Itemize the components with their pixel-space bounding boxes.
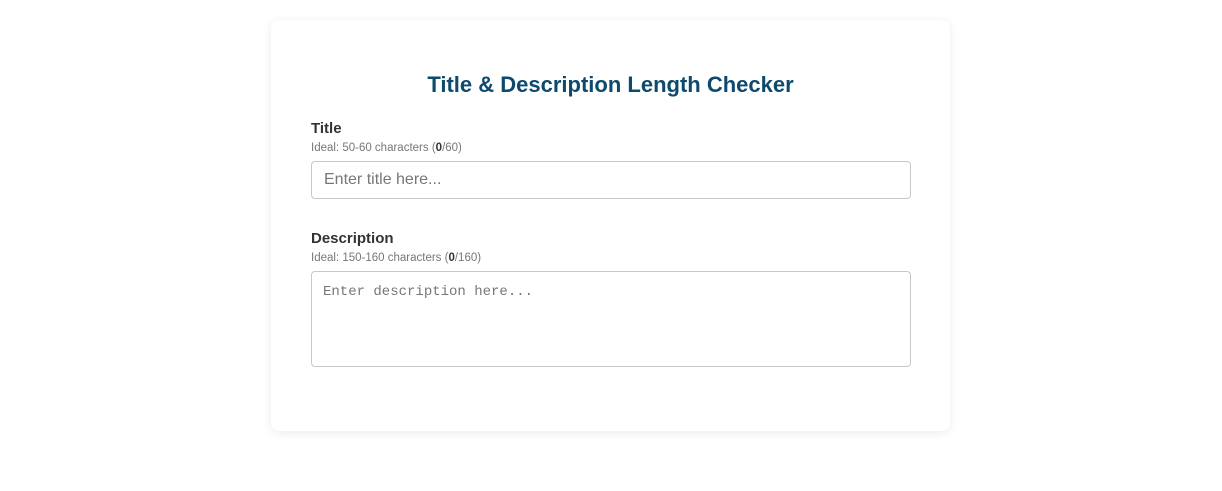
input: title [311,161,911,199]
textarea: description: Enter description here... [323,284,533,300]
label: title: Title [311,120,342,137]
hint: title length: Ideal: 50-60 characters (0/60) [311,142,462,154]
input: title: Enter title here... [324,171,441,188]
textarea: description [311,271,911,367]
hint: description length: Ideal: 150-160 characters (0/160) [311,252,481,264]
title: Title & Description Length Checker [427,72,794,97]
label: description: Description [311,230,394,247]
panel: checker card [271,20,950,431]
